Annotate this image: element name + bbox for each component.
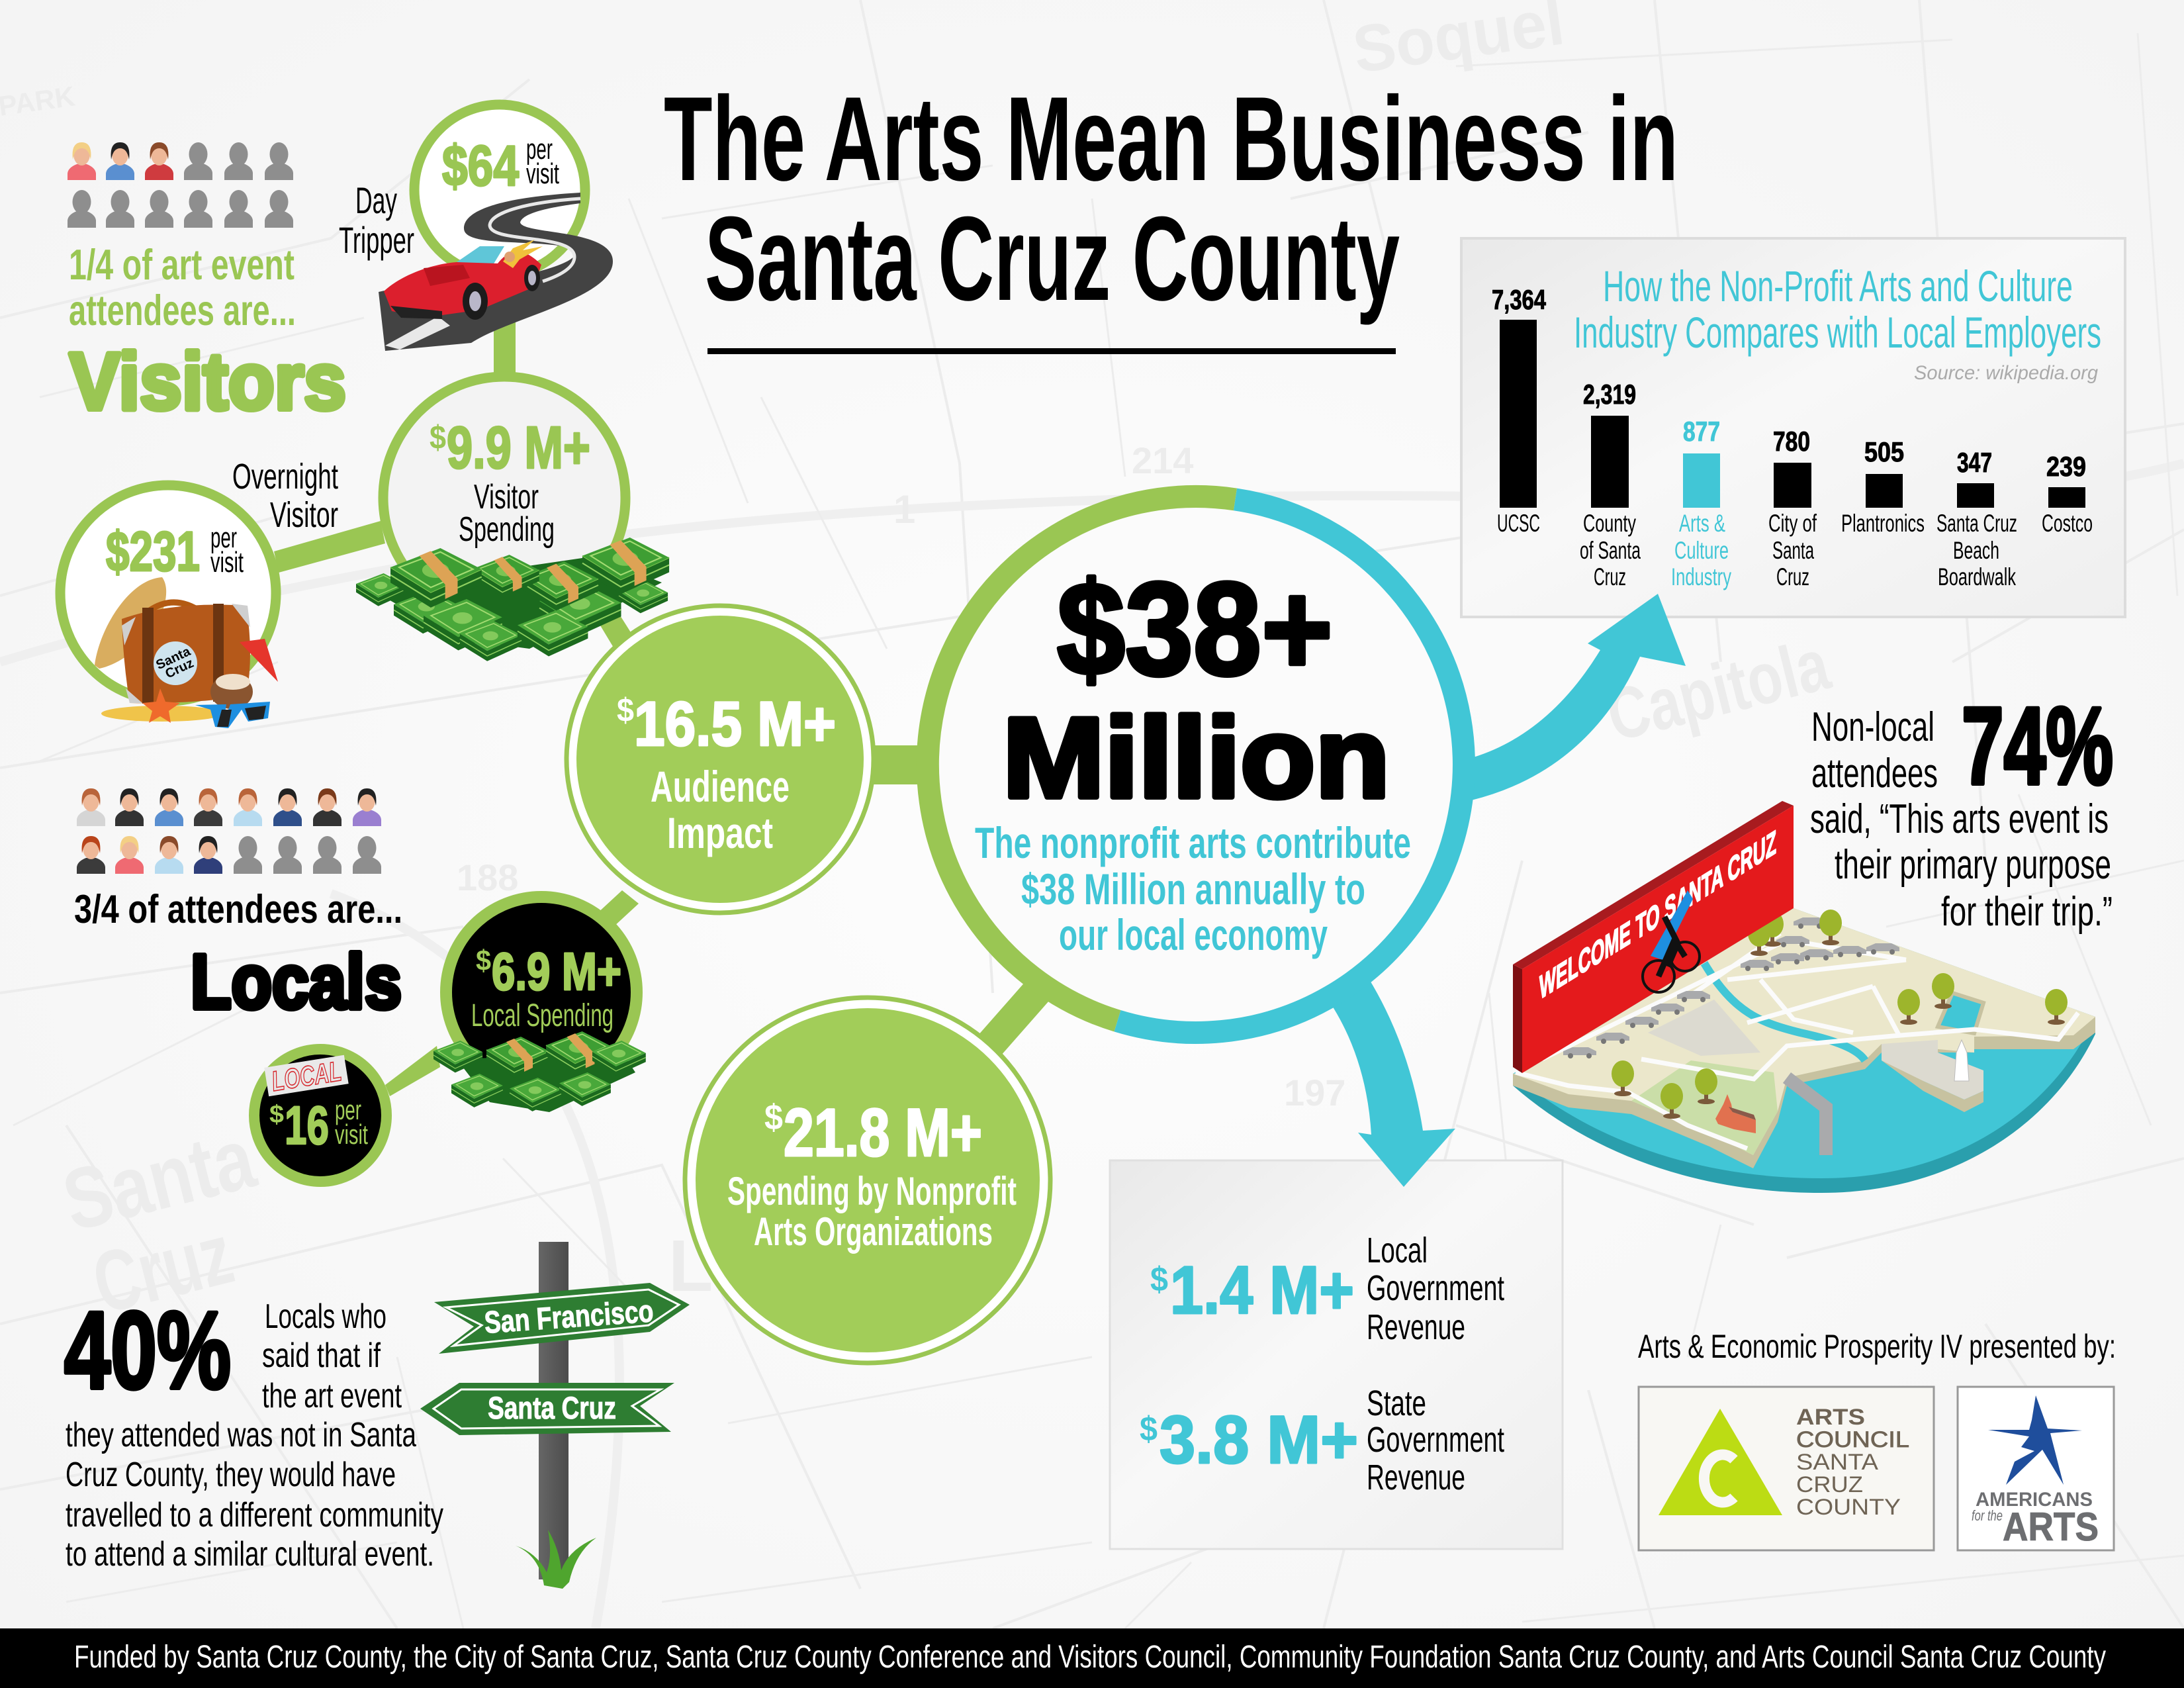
billboard xyxy=(1513,801,1794,1073)
heading: visitors xyxy=(69,240,346,426)
circle: local per visit: visit xyxy=(335,1119,368,1150)
icon: suitcase: Santa xyxy=(154,644,193,673)
icon: cyclist with surfboard xyxy=(1643,890,1700,992)
circle: audience impact: 16.5 M+ xyxy=(634,689,836,759)
background map: 197 xyxy=(1284,1072,1345,1113)
label: day tripper: Day xyxy=(355,179,397,221)
stat: 40 percent: the art event xyxy=(262,1377,402,1415)
bar chart: City of xyxy=(1768,510,1817,537)
stat: 40 percent: to attend a similar cultural event. xyxy=(66,1535,434,1573)
title: Santa Cruz County xyxy=(705,192,1400,326)
stat: 40 percent: they attended was not in Santa xyxy=(66,1416,416,1454)
circle: spending by nonprofit arts organizations xyxy=(685,998,1050,1363)
bar chart: 347 xyxy=(1957,447,1992,478)
circle: local per visit: LOCAL xyxy=(269,1055,343,1097)
bar chart: Plantronics xyxy=(1841,510,1925,537)
icon: winding road xyxy=(379,193,613,351)
arrow: to employers chart xyxy=(1471,594,1686,800)
bar chart: Costco xyxy=(2042,510,2093,537)
label: overnight visitor: Visitor xyxy=(270,495,338,535)
bar chart: Cruz xyxy=(1594,563,1626,590)
central circle: $38+ million: The nonprofit arts contribute xyxy=(975,818,1411,867)
stat: 40 percent xyxy=(64,1289,443,1573)
stat: 74 percent: attendees xyxy=(1811,751,1938,796)
background map: Capitola xyxy=(1599,624,1837,757)
panel: government revenue: Revenue xyxy=(1367,1307,1465,1347)
bar chart: 780 xyxy=(1773,426,1810,457)
people: visitors pictogram xyxy=(68,142,293,228)
bar chart: of Santa xyxy=(1580,537,1641,564)
circle: spending by nonprofit arts organizations: Arts Organizations xyxy=(754,1209,993,1254)
bar chart: 7,364 xyxy=(1492,284,1546,315)
icon: money pile xyxy=(356,538,669,661)
circle: overnight visitor: visit xyxy=(210,546,244,579)
background map: 188 xyxy=(457,857,518,898)
bar chart: 505 xyxy=(1864,436,1904,467)
circle: audience impact: Impact xyxy=(667,808,773,857)
icon: signpost: San Francisco xyxy=(483,1293,655,1340)
background map: 214 xyxy=(1132,440,1193,481)
title xyxy=(664,72,1678,354)
circle: audience impact xyxy=(567,606,874,913)
footer xyxy=(0,1628,2184,1688)
bar chart: 239 xyxy=(2046,451,2086,482)
panel: government revenue: Government xyxy=(1367,1420,1504,1460)
background map: Live Oak xyxy=(668,1225,972,1307)
panel: government revenue: Revenue xyxy=(1367,1458,1465,1497)
logo: arts council santa cruz county xyxy=(1639,1387,1934,1550)
circle: visitor spending: Spending xyxy=(459,510,555,549)
circle: local per visit: $ xyxy=(269,1101,284,1129)
icon: red convertible xyxy=(384,240,543,320)
panel: government revenue: 1.4 M+ xyxy=(1170,1252,1354,1328)
chart source: Source: wikipedia.org xyxy=(1914,362,2098,384)
logo: arts council santa cruz county: ARTS xyxy=(1796,1405,1865,1430)
logo: americans for the arts: AMERICANS xyxy=(1976,1489,2093,1511)
circle: audience impact: Audience xyxy=(651,762,790,811)
logo: americans for the arts: for the xyxy=(1972,1507,2003,1524)
central circle: $38+ million: $38+ xyxy=(1057,555,1333,703)
circle: overnight visitor: $231 xyxy=(106,520,200,583)
background map: Santa xyxy=(54,1109,265,1249)
background map: 1 xyxy=(893,487,915,532)
central circle: $38+ million: $38 Million annually to xyxy=(1021,865,1365,914)
bar chart: 877 xyxy=(1683,416,1720,447)
circle: local per visit: 16 xyxy=(285,1096,329,1156)
circle: local spending: $ xyxy=(476,945,491,977)
panel: government revenue: 3.8 M+ xyxy=(1160,1402,1358,1477)
circle: overnight visitor xyxy=(60,485,276,701)
connectors xyxy=(274,311,1059,1096)
circle: day tripper: per xyxy=(526,133,553,165)
chart heading xyxy=(1574,261,2101,357)
label: day tripper: Tripper xyxy=(339,219,414,261)
circle: local spending: 6.9 M+ xyxy=(492,942,621,1001)
circle: overnight visitor: per xyxy=(210,522,237,554)
stat: 40 percent: said that if xyxy=(262,1336,381,1375)
circle: audience impact: $ xyxy=(617,692,634,729)
circle: visitor spending: 9.9 M+ xyxy=(447,415,590,481)
circle: day tripper: visit xyxy=(526,158,559,190)
stat: 40 percent: 40% xyxy=(64,1289,231,1412)
logo: americans for the arts xyxy=(1958,1387,2114,1550)
circle: visitor spending xyxy=(383,377,625,619)
arrow: to government revenue xyxy=(1330,978,1455,1187)
panel: government revenue xyxy=(1110,1160,1563,1549)
logo: arts council santa cruz county: CRUZ xyxy=(1796,1472,1863,1497)
circle: local per visit xyxy=(254,1049,387,1182)
billboard: WELCOME TO SANTA CRUZ xyxy=(1539,823,1776,1007)
bar chart: Boardwalk xyxy=(1938,563,2016,590)
stat: 74 percent: 74% xyxy=(1962,685,2113,808)
bar chart: County xyxy=(1583,510,1636,537)
illustration: map of Santa Cruz with billboard xyxy=(1513,801,2095,1193)
circle: day tripper xyxy=(414,105,585,275)
logo: arts council santa cruz county: SANTA xyxy=(1796,1450,1878,1475)
heading: locals: Locals xyxy=(191,939,402,1025)
circle: local spending: Local Spending xyxy=(471,998,614,1033)
logo: arts council santa cruz county: COUNCIL xyxy=(1796,1427,1909,1452)
title: The Arts Mean Business in xyxy=(664,72,1678,206)
stat: 74 percent xyxy=(1810,685,2113,935)
label: overnight visitor: Overnight xyxy=(232,457,338,496)
logo: arts council santa cruz county: COUNTY xyxy=(1796,1495,1901,1520)
bar chart: Santa xyxy=(1772,537,1814,564)
panel: government revenue: $ xyxy=(1140,1410,1158,1448)
bar chart: Arts & xyxy=(1679,510,1725,537)
stat: 74 percent: for their trip.” xyxy=(1941,889,2113,935)
panel: government revenue: Local xyxy=(1367,1231,1428,1270)
label: day tripper xyxy=(339,179,414,261)
bar chart: Culture xyxy=(1674,537,1729,564)
heading: locals xyxy=(74,887,402,1025)
panel: government revenue: $ xyxy=(1150,1260,1168,1299)
circle: local spending xyxy=(446,897,637,1088)
central circle: $38+ million: our local economy xyxy=(1059,910,1328,959)
label: overnight visitor xyxy=(232,457,338,535)
panel: government revenue: Government xyxy=(1367,1268,1504,1308)
icon: money pile small xyxy=(433,1031,646,1112)
heading: locals: 3/4 of attendees are... xyxy=(74,887,402,931)
circle: local per visit: per xyxy=(335,1094,361,1125)
icon: signpost: Santa Cruz xyxy=(488,1390,616,1425)
stat: 40 percent: Locals who xyxy=(265,1297,387,1336)
bar chart: Cruz xyxy=(1776,563,1809,590)
background map: Cruz xyxy=(83,1205,242,1332)
circle: day tripper: $64 xyxy=(442,134,519,198)
central circle: $38+ million xyxy=(928,496,1464,1033)
icon: suitcase xyxy=(95,577,278,728)
bar chart: Industry xyxy=(1671,563,1731,590)
bar chart: UCSC xyxy=(1497,510,1540,537)
bar chart xyxy=(1492,284,2093,590)
stat: 74 percent: Non-local xyxy=(1811,704,1934,750)
people: locals pictogram xyxy=(77,788,381,874)
central circle: $38+ million: Million xyxy=(1003,694,1390,821)
bar chart: Beach xyxy=(1953,537,1999,564)
circle: spending by nonprofit arts organizations: 21.8 M+ xyxy=(784,1095,982,1170)
logo: americans for the arts: ARTS xyxy=(2003,1505,2099,1549)
heading: visitors: 1/4 of art event xyxy=(69,240,295,289)
heading: visitors: Visitors xyxy=(69,336,346,426)
bar chart: Santa Cruz xyxy=(1936,510,2017,537)
circle: spending by nonprofit arts organizations: Spending by Nonprofit xyxy=(727,1169,1017,1213)
circle: visitor spending: $ xyxy=(430,419,446,456)
stat: 40 percent: travelled to a different community xyxy=(66,1496,443,1534)
icon: suitcase: Cruz xyxy=(163,656,196,681)
bar chart: 2,319 xyxy=(1583,379,1636,410)
panel: employers chart xyxy=(1461,238,2125,617)
icon: signpost xyxy=(420,1242,690,1589)
panel: government revenue: State xyxy=(1367,1383,1426,1423)
stat: 40 percent: Cruz County, they would have xyxy=(66,1456,396,1494)
heading: visitors: attendees are... xyxy=(69,286,296,334)
circle: visitor spending: Visitor xyxy=(474,478,539,516)
circle: spending by nonprofit arts organizations: $ xyxy=(764,1098,783,1137)
